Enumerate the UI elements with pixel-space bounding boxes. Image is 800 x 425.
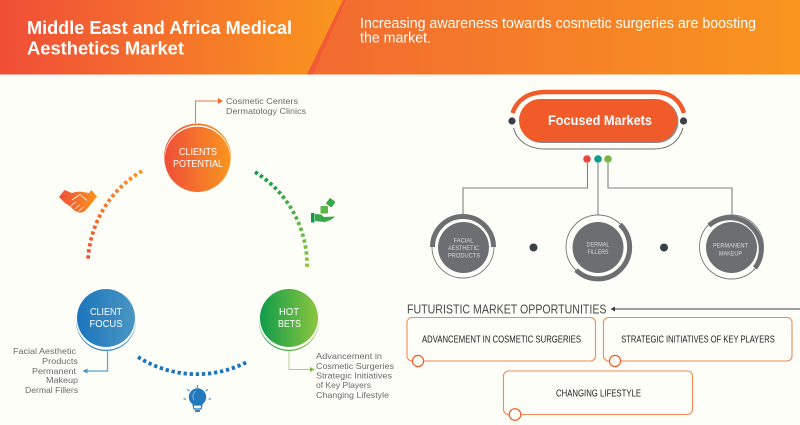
label: hot bets list: Cosmetic Surgeries — [316, 361, 394, 371]
title: Aesthetics Market — [27, 38, 184, 58]
market circle: permanent makeup — [700, 215, 764, 279]
dotted arc: green — [255, 172, 307, 269]
connector arrow: client focus — [82, 351, 108, 374]
gray bottom arc — [514, 128, 683, 149]
header subtitle: the market. — [360, 30, 431, 46]
separator dot — [530, 244, 538, 252]
node: clients potential — [164, 124, 231, 192]
market circle: permanent makeup: PERMANENT — [713, 242, 748, 250]
pill label: Focused Markets — [548, 112, 652, 128]
label: clients potential list: Cosmetic Centers — [226, 96, 298, 106]
label: clients potential list: Dermatology Clinics — [226, 106, 306, 116]
arrow to heading — [610, 306, 800, 312]
label: hot bets list: Advancement in — [316, 351, 382, 361]
opportunity box: strategic initiatives — [604, 318, 792, 367]
opportunity box: changing lifestyle: CHANGING LIFESTYLE — [556, 388, 641, 400]
market circle: facial aesthetic products — [432, 216, 494, 278]
separator dot — [660, 244, 668, 252]
label: client focus list: Makeup — [46, 375, 78, 385]
opportunity box: advancement: ADVANCEMENT IN COSMETIC SURGERIES — [422, 334, 581, 346]
pill — [519, 99, 677, 142]
header subtitle — [360, 15, 756, 46]
market circle: facial aesthetic products: FACIAL — [454, 238, 474, 244]
label: client focus list: Products — [42, 356, 78, 366]
dotted arc: blue — [138, 357, 247, 374]
node: hot bets: HOT — [279, 306, 300, 318]
end dots — [508, 117, 516, 125]
icon: handshake — [59, 190, 97, 213]
node: clients potential: CLIENTS — [179, 146, 217, 158]
connector arrow: hot bets — [289, 351, 314, 372]
label: client focus list — [13, 346, 78, 395]
node: clients potential: POTENTIAL — [173, 158, 223, 170]
market circle: dermal fillers — [566, 215, 630, 279]
label: hot bets list: of Key Players — [316, 380, 371, 390]
heading: futuristic market opportunities: FUTURISTIC MARKET OPPORTUNITIES — [407, 302, 607, 316]
market circle: facial aesthetic products: AESTHETIC — [448, 245, 479, 252]
label: client focus list: Permanent — [32, 366, 77, 376]
icon: hand holding dice — [311, 198, 336, 222]
focused markets badge — [508, 92, 687, 149]
header subtitle: Increasing awareness towards cosmetic surgeries are boosting — [360, 15, 756, 32]
dotted arc: orange — [88, 171, 142, 260]
node: hot bets — [259, 289, 319, 351]
market circle: facial aesthetic products: PRODUCTS — [448, 252, 480, 260]
node: client focus — [76, 289, 136, 351]
node: hot bets: BETS — [278, 318, 301, 330]
colored dots — [583, 155, 612, 163]
connector arrow: clients potential — [196, 98, 223, 123]
icon: light bulb — [184, 385, 211, 411]
tree connectors — [463, 163, 732, 216]
opportunity box: advancement — [407, 318, 596, 367]
header banner — [0, 0, 800, 74]
label: hot bets list — [316, 351, 394, 400]
label: hot bets list: Changing Lifestyle — [316, 390, 389, 400]
title — [27, 18, 292, 58]
orange top arc — [512, 92, 684, 113]
label: client focus list: Facial Aesthetic — [13, 346, 76, 356]
node: client focus: FOCUS — [90, 318, 122, 330]
title: Middle East and Africa Medical — [27, 18, 292, 38]
market circle: dermal fillers: DERMAL — [586, 242, 610, 248]
label: clients potential list — [226, 96, 306, 116]
label: hot bets list: Strategic Initiatives — [316, 370, 392, 380]
market circle: permanent makeup: MAKEUP — [719, 250, 742, 258]
pill shadow — [520, 100, 678, 143]
opportunity box: changing lifestyle — [504, 371, 692, 420]
market circle: dermal fillers: FILLERS — [588, 249, 609, 256]
label: client focus list: Dermal Fillers — [25, 385, 78, 395]
node: client focus: CLIENT — [90, 306, 122, 318]
